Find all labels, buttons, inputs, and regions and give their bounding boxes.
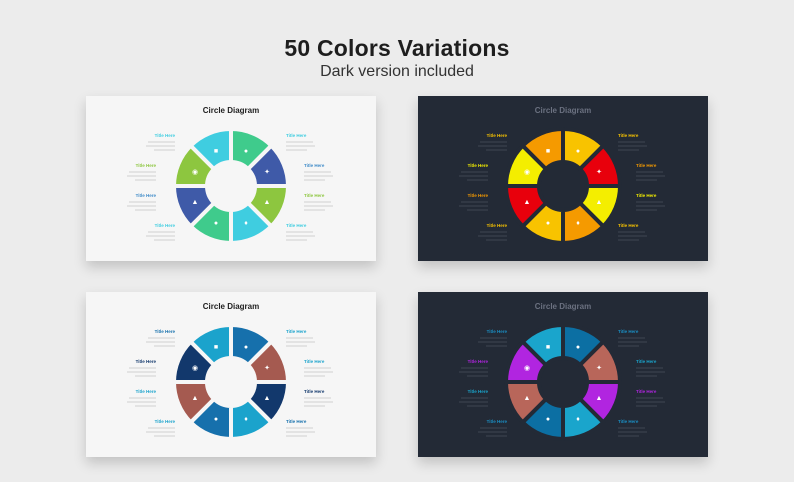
panel: dark purple/brown: Title Here <box>487 329 507 334</box>
panel: dark warm: Title Here <box>468 193 488 198</box>
panel: light blue/brown: Circle Diagram <box>203 302 259 311</box>
panel: dark warm: ● <box>546 220 550 227</box>
panel: light green/navy: Title Here <box>304 163 325 168</box>
panel: light green/navy: ● <box>244 148 248 155</box>
panel: dark purple/brown: ▲ <box>596 395 602 402</box>
panel: light green/navy: ▲ <box>192 199 198 206</box>
panel: light blue/brown: Title Here <box>304 359 325 364</box>
panel: dark purple/brown: Title Here <box>487 419 507 424</box>
panel: light blue/brown: ▲ <box>264 395 270 402</box>
panel: light green/navy: ■ <box>214 148 218 155</box>
panel: dark purple/brown: ♦ <box>576 416 580 423</box>
panel: dark warm: Title Here <box>468 163 488 168</box>
panel: light blue/brown: ● <box>214 416 218 423</box>
panel: dark warm: Title Here <box>618 133 639 138</box>
panel: dark purple/brown: Circle Diagram <box>535 302 591 311</box>
panel: light blue/brown: ▲ <box>192 395 198 402</box>
panel: dark purple/brown: ▲ <box>524 395 530 402</box>
panel: dark purple/brown: Title Here <box>618 329 639 334</box>
panel: light blue/brown: Title Here <box>304 389 325 394</box>
panel: dark purple/brown: Title Here <box>636 389 657 394</box>
panel: dark warm: ✦ <box>596 168 602 176</box>
panel: light blue/brown <box>86 292 376 457</box>
panel: dark purple/brown: ● <box>576 344 580 351</box>
panel: light blue/brown: ■ <box>214 344 218 351</box>
panel: light blue/brown: Title Here <box>155 329 175 334</box>
panel: light green/navy: ◉ <box>192 169 198 176</box>
ring diagram <box>506 129 620 243</box>
panel: dark warm: Title Here <box>618 223 639 228</box>
panel: dark warm: ▲ <box>596 199 602 206</box>
panel: light blue/brown: Title Here <box>286 419 307 424</box>
panel: light green/navy: Title Here <box>286 133 307 138</box>
panel: dark purple/brown: ◉ <box>524 365 530 372</box>
ring diagram <box>174 325 288 439</box>
panel: light blue/brown: Title Here <box>155 419 175 424</box>
panel: light green/navy <box>86 96 376 261</box>
panel: light green/navy: Title Here <box>155 133 175 138</box>
panel: dark purple/brown: ✦ <box>596 364 602 372</box>
panel: dark warm: ■ <box>546 148 550 155</box>
panel: light green/navy: Title Here <box>155 223 175 228</box>
panel: dark warm: ◉ <box>524 169 530 176</box>
panel: dark warm: Title Here <box>487 223 507 228</box>
panel: light green/navy: ♦ <box>244 220 248 227</box>
panel: dark warm: ● <box>576 148 580 155</box>
panel: dark warm: Title Here <box>487 133 507 138</box>
ring diagram <box>174 129 288 243</box>
panel: dark purple/brown: Title Here <box>618 419 639 424</box>
subtitle: Dark version included <box>320 63 474 80</box>
ring diagram <box>506 325 620 439</box>
panel: light green/navy: Circle Diagram <box>203 106 259 115</box>
panel: dark warm <box>418 96 708 261</box>
panel: light blue/brown: ♦ <box>244 416 248 423</box>
panel: light blue/brown: Title Here <box>286 329 307 334</box>
panel: light green/navy: Title Here <box>304 193 325 198</box>
panel: light blue/brown: ● <box>244 344 248 351</box>
panel: light green/navy: ✦ <box>264 168 270 176</box>
panel: light green/navy: ▲ <box>264 199 270 206</box>
panel: light green/navy: ● <box>214 220 218 227</box>
title: 50 Colors Variations <box>284 35 510 61</box>
panel: light blue/brown: ◉ <box>192 365 198 372</box>
panel: dark purple/brown: ● <box>546 416 550 423</box>
panel: light blue/brown: Title Here <box>136 359 156 364</box>
panel: dark warm: Circle Diagram <box>535 106 591 115</box>
panel: dark warm: Title Here <box>636 163 657 168</box>
panel: dark warm: Title Here <box>636 193 657 198</box>
panel: light green/navy: Title Here <box>136 163 156 168</box>
panel: dark purple/brown: Title Here <box>636 359 657 364</box>
panel: light green/navy: Title Here <box>136 193 156 198</box>
panel: light blue/brown: Title Here <box>136 389 156 394</box>
panel: dark warm: ♦ <box>576 220 580 227</box>
panel: dark purple/brown: ■ <box>546 344 550 351</box>
panel: dark purple/brown <box>418 292 708 457</box>
panel: light blue/brown: ✦ <box>264 364 270 372</box>
panel: dark warm: ▲ <box>524 199 530 206</box>
panel: dark purple/brown: Title Here <box>468 359 488 364</box>
panel: light green/navy: Title Here <box>286 223 307 228</box>
panel: dark purple/brown: Title Here <box>468 389 488 394</box>
